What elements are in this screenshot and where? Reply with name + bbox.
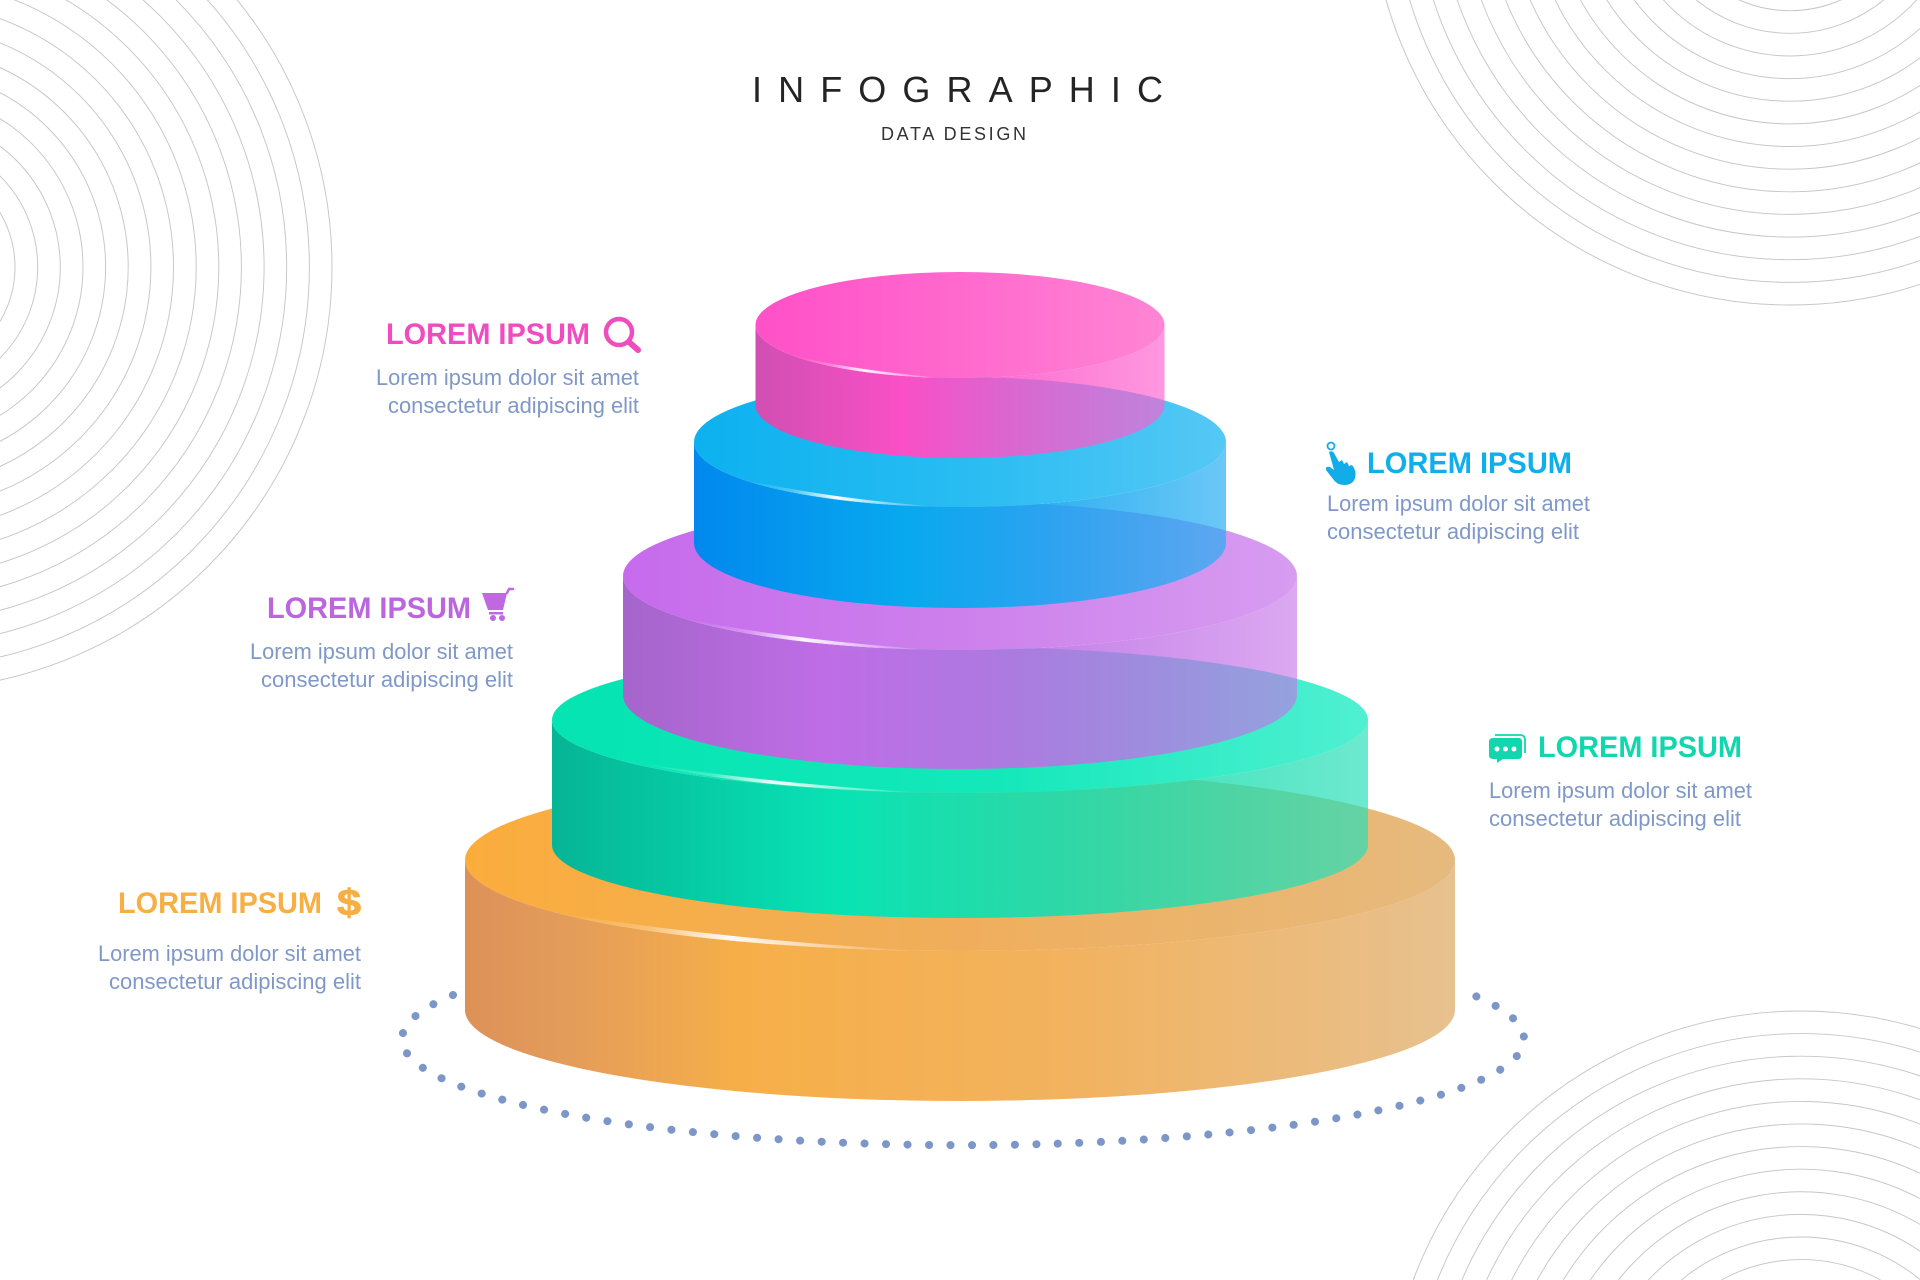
icon: magnifier [606,319,638,350]
stacked cylinder pyramid [465,272,1455,1101]
description: Lorem ipsum dolor sit amet [98,941,361,966]
heading: infographic: INFOGRAPHIC [752,69,1163,110]
label: pink tier [376,318,639,418]
icon: dollar sign: $ [337,882,361,923]
description [1327,491,1590,544]
tier: green [552,647,1368,918]
label: orange tier [98,882,361,994]
heading: LOREM IPSUM [118,887,322,920]
description: consectetur adipiscing elit [388,393,639,418]
tier: pink top [756,272,1164,458]
title [752,69,1163,144]
decorative concentric rings: top left [0,0,332,690]
description: Lorem ipsum dolor sit amet [376,365,639,390]
description [250,639,513,692]
icon: shopping cart [482,589,513,621]
dotted base ellipse [402,990,1524,1145]
tier: orange base [465,769,1455,1101]
description [98,941,361,994]
label: blue tier [1326,442,1590,544]
description: consectetur adipiscing elit [261,667,513,692]
description: Lorem ipsum dolor sit amet [1327,491,1590,516]
tier: blue [694,377,1226,608]
description: Lorem ipsum dolor sit amet [1489,778,1752,803]
label: green tier [1489,731,1752,831]
description: consectetur adipiscing elit [1327,519,1579,544]
label: purple tier [250,589,513,692]
description: Lorem ipsum dolor sit amet [250,639,513,664]
description: consectetur adipiscing elit [109,969,361,994]
description [376,365,639,418]
icon: chat bubbles [1489,735,1525,763]
icon: pointing hand [1326,442,1356,485]
heading: LOREM IPSUM [1538,731,1742,764]
heading: LOREM IPSUM [1367,447,1572,480]
description: consectetur adipiscing elit [1489,806,1741,831]
decorative concentric rings: top right [1370,0,1920,305]
subheading: data design: DATA DESIGN [881,124,1026,144]
decorative concentric rings: bottom right [1413,1011,1920,1280]
description [1489,778,1752,831]
heading: LOREM IPSUM [267,592,471,625]
tier: purple [623,502,1297,769]
heading: LOREM IPSUM [386,318,590,351]
